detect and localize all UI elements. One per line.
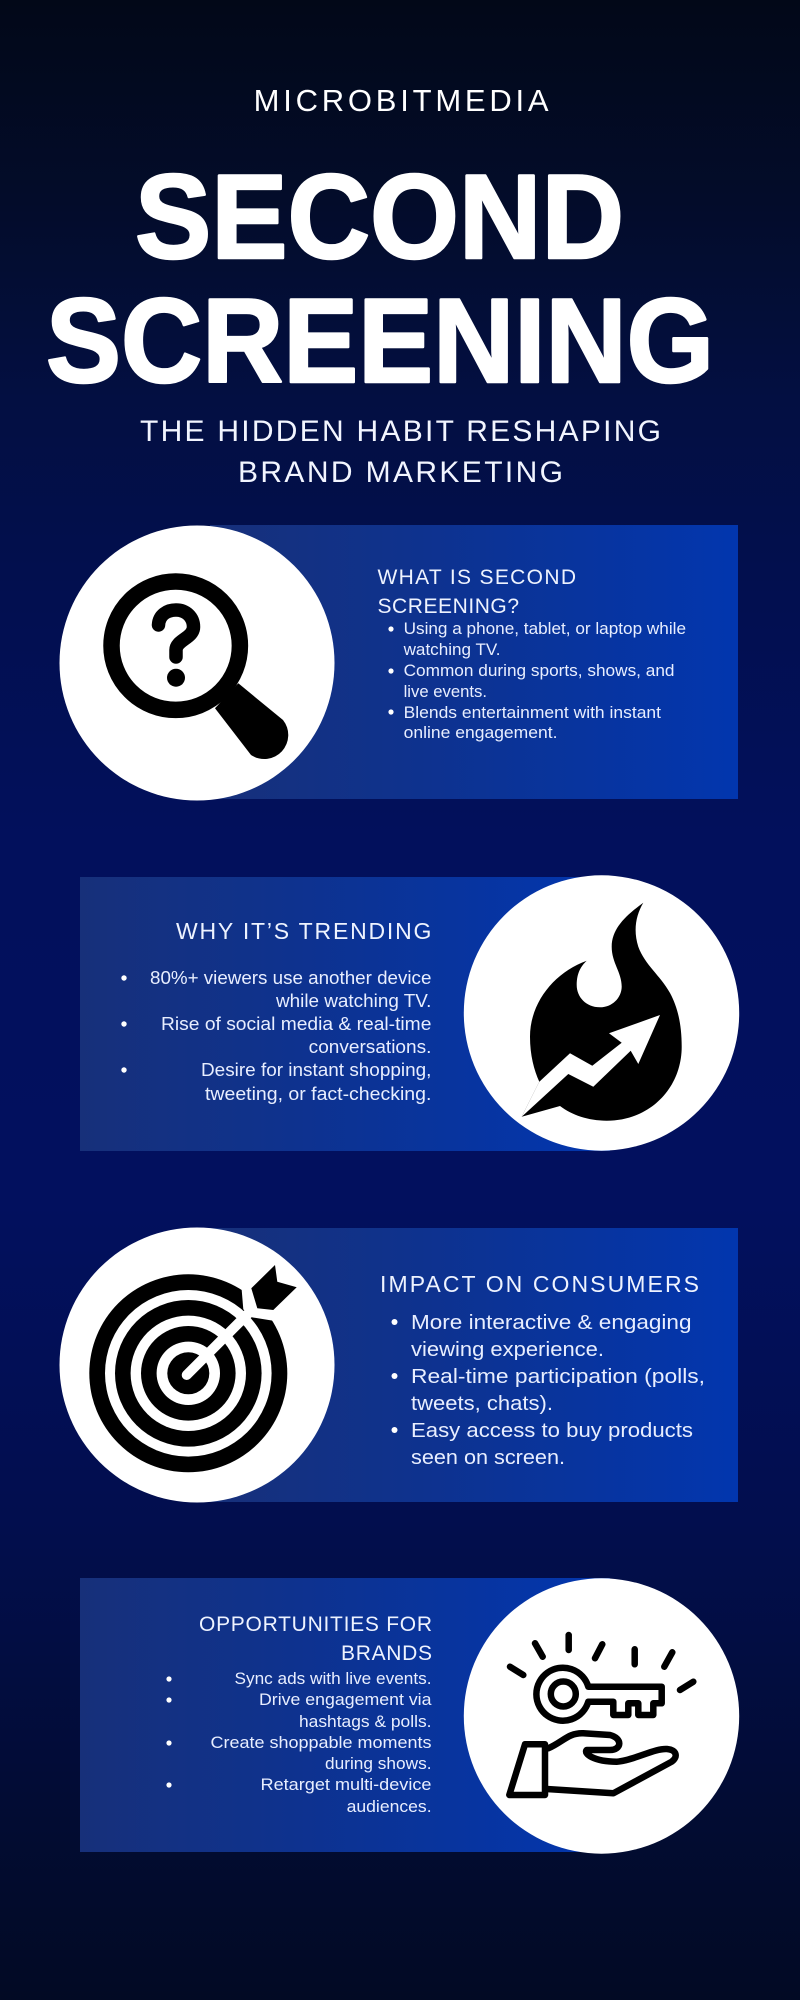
bullet list: Easy access to buy products [411,1419,693,1442]
bullet list: live events. [404,683,487,701]
panel: impact on consumers [60,1228,738,1502]
title [46,150,714,408]
subtitle: THE HIDDEN HABIT RESHAPING [140,415,661,448]
title: SCREENING [46,274,714,408]
heading: BRANDS [341,1642,432,1665]
bullet list: online engagement. [404,724,558,742]
bullet list: watching TV. [403,641,500,659]
panel background [80,877,610,1151]
bullet list: Create shoppable moments [210,1734,432,1752]
icon: flame with rising arrow [522,903,682,1121]
subtitle: BRAND MARKETING [238,456,563,489]
bullet list: Desire for instant shopping, [201,1060,431,1080]
bullet list: Common during sports, shows, and [404,662,674,680]
bullet list [388,620,686,742]
panel: what is second screening [60,525,738,800]
icon circle [60,1228,334,1502]
brand name: MICROBITMEDIA [254,83,549,118]
bullet list [392,1311,705,1469]
bullet list: Rise of social media & real-time [161,1014,431,1034]
heading [199,1613,432,1665]
bullet list [166,1670,432,1816]
icon: key above open hand [509,1635,693,1795]
bullet list: while watching TV. [275,991,431,1011]
panel: opportunities for brands [80,1578,739,1854]
bullet list: viewing experience. [411,1338,604,1361]
bullet list: during shows. [325,1755,432,1773]
heading [378,566,576,618]
heading: SCREENING? [378,595,519,618]
bullet list: More interactive & engaging [411,1311,692,1334]
bullet list: Drive engagement via [259,1691,432,1709]
icon: magnifying glass with question mark [112,582,288,759]
title: SECOND [135,150,624,284]
panel: why it's trending [80,875,739,1151]
heading: IMPACT ON CONSUMERS [380,1271,699,1297]
icon: target with arrow [89,1265,297,1472]
icon circle [60,526,334,800]
subtitle [140,415,661,489]
heading: WHAT IS SECOND [378,566,576,589]
bullet list: hashtags & polls. [299,1713,432,1731]
panel background [210,525,738,799]
heading: OPPORTUNITIES FOR [199,1613,432,1636]
bullet list: Using a phone, tablet, or laptop while [404,620,686,638]
bullet list: tweets, chats). [411,1392,553,1415]
bullet list: 80%+ viewers use another device [150,968,431,988]
bullet list: audiences. [347,1798,432,1816]
bullet list [121,968,431,1104]
panel background [210,1228,738,1502]
bullet list: tweeting, or fact-checking. [205,1084,431,1104]
icon circle [464,1578,739,1854]
bullet list: seen on screen. [411,1446,565,1469]
bullet list: Real-time participation (polls, [411,1365,705,1388]
panel background [80,1578,610,1852]
bullet list: Sync ads with live events. [234,1670,432,1688]
bullet list: conversations. [309,1037,431,1057]
bullet list: Retarget multi-device [260,1776,432,1794]
heading: WHY IT’S TRENDING [176,918,431,944]
icon circle [464,875,739,1151]
bullet list: Blends entertainment with instant [404,704,661,722]
